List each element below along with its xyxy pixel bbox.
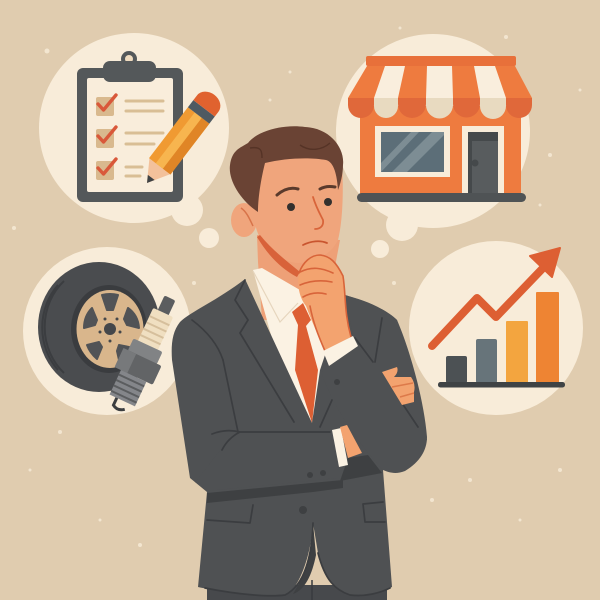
shirt [253, 268, 332, 425]
icon: tire [38, 262, 160, 392]
collar line [253, 271, 298, 322]
neck [257, 235, 340, 320]
jacket shadow [207, 455, 382, 503]
left forearm [195, 432, 338, 491]
jacket lapel and seam lines [192, 280, 390, 596]
ear [231, 203, 257, 237]
person: businessman [172, 126, 427, 600]
right hand fingers [382, 367, 415, 405]
right forearm [322, 295, 427, 473]
icon: growth chart [432, 248, 565, 388]
right shirt cuff [323, 336, 358, 366]
window [375, 126, 450, 177]
head [254, 147, 343, 263]
door [462, 126, 504, 194]
eyes [287, 203, 295, 211]
thought bubble: store [336, 34, 530, 258]
thought bubble: parts [23, 247, 191, 415]
awning [348, 66, 532, 98]
mouth [303, 241, 327, 245]
nose [313, 197, 323, 229]
thought bubble: checklist [39, 33, 229, 248]
icon: pencil [136, 87, 225, 191]
wheel rim [76, 290, 144, 368]
thinking hand [298, 255, 351, 351]
brows [277, 186, 335, 195]
tie [292, 303, 318, 423]
trousers [207, 585, 387, 600]
icon: clipboard checklist [77, 51, 183, 202]
icon: spark plug [99, 289, 189, 418]
icon: storefront [348, 56, 532, 202]
thought bubble: growth [409, 241, 583, 415]
hair [230, 126, 343, 212]
jacket body [172, 279, 427, 595]
left shirt cuff and wrist [332, 428, 348, 467]
